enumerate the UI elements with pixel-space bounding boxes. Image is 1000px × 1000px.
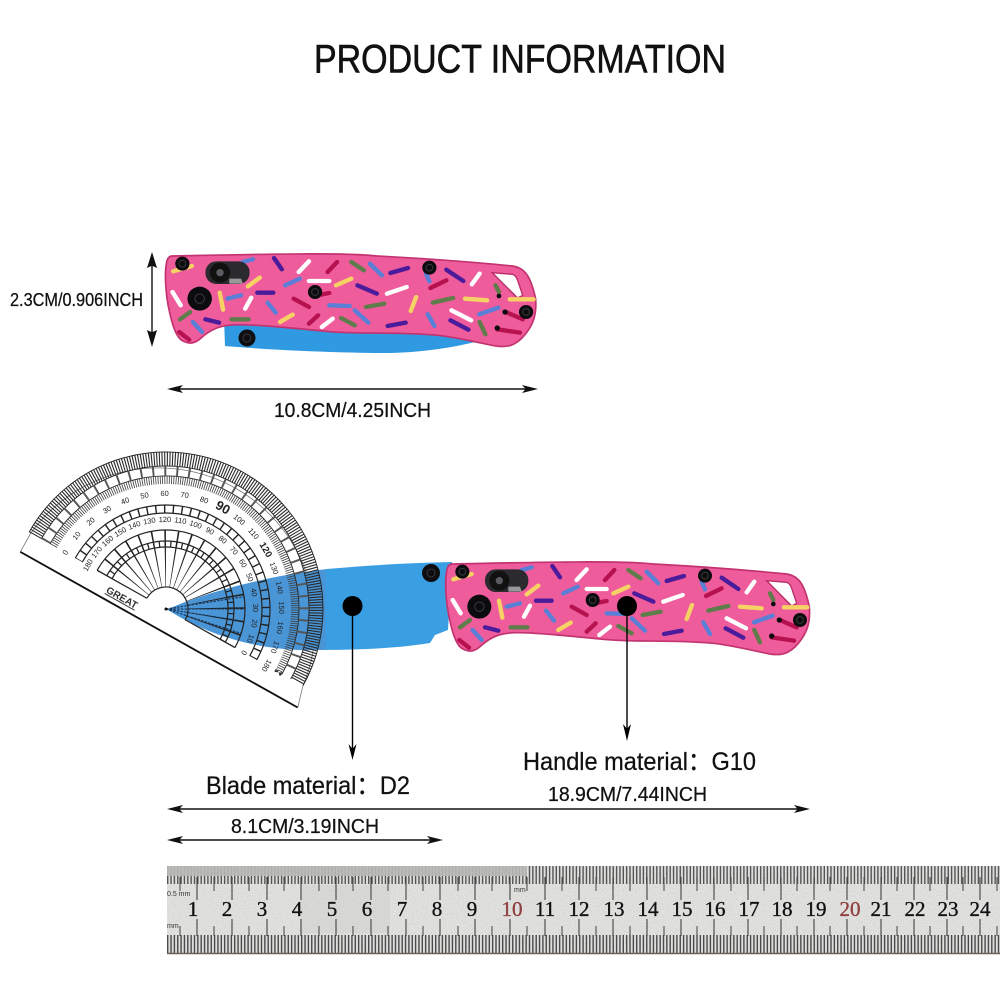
protractor outer numbers: 40 (120, 495, 131, 507)
blade pivot screw (238, 330, 256, 346)
ruler numbers: 24 (970, 897, 991, 921)
ruler numbers: 21 (870, 897, 892, 921)
ruler half ticks (180, 877, 997, 936)
ruler numbers: 7 (397, 897, 407, 921)
blade material pointer (342, 596, 362, 760)
protractor inner numbers: 170 (89, 545, 104, 560)
protractor inner numbers: 90 (204, 525, 216, 537)
ruler (167, 866, 1000, 954)
height label: 2.3CM/0.906INCH (10, 290, 143, 310)
ruler numbers: 11 (535, 897, 555, 921)
ruler numbers: 12 (568, 897, 590, 921)
ruler numbers: 19 (806, 897, 826, 921)
ruler numbers: 16 (704, 897, 726, 921)
ruler numbers: 23 (938, 897, 958, 921)
protractor outer numbers: 10 (70, 530, 83, 542)
protractor inner numbers: 50 (244, 572, 255, 583)
ruler numbers: 5 (327, 897, 337, 921)
overall length arrow (167, 805, 810, 813)
blade length arrow (167, 836, 443, 844)
protractor base (20, 412, 376, 708)
ruler numbers: 1 (188, 897, 198, 921)
protractor outer numbers: 110 (246, 526, 261, 541)
ruler numbers: 6 (362, 897, 372, 921)
protractor outer numbers: 80 (199, 494, 210, 506)
ruler numbers: 8 (432, 897, 442, 921)
protractor outer numbers: 160 (275, 621, 285, 635)
protractor outer numbers: 150 (277, 601, 286, 614)
protractor outer numbers: 120 (257, 540, 274, 560)
title: PRODUCT INFORMATION (314, 38, 726, 82)
blade length label: 8.1CM/3.19INCH (231, 816, 379, 838)
ruler numbers (188, 897, 991, 921)
ruler numbers: 4 (292, 897, 303, 921)
blade pivot screw (422, 564, 440, 582)
closed length arrow (167, 385, 538, 393)
height arrow (147, 252, 157, 347)
ruler numbers: 14 (638, 897, 659, 921)
protractor outer numbers (58, 442, 331, 673)
protractor inner numbers: 120 (159, 515, 171, 524)
protractor outer numbers: 30 (101, 504, 113, 516)
protractor inner numbers: 60 (237, 557, 249, 569)
protractor inner numbers: 100 (188, 518, 203, 531)
protractor inner numbers: 180 (81, 558, 95, 573)
protractor inner numbers: 110 (174, 515, 187, 526)
ruler numbers: 22 (904, 897, 926, 921)
protractor inner numbers: 70 (228, 545, 240, 557)
protractor outer numbers: 60 (160, 489, 169, 498)
protractor scale (20, 395, 380, 702)
ruler unit labels: mm (167, 923, 179, 930)
protractor outer numbers: 170 (269, 640, 281, 655)
ruler unit labels: 0.5 mm (167, 891, 191, 898)
protractor outer numbers: 70 (180, 490, 190, 500)
protractor inner numbers: 40 (249, 587, 259, 597)
protractor outer numbers: 50 (140, 490, 149, 501)
ruler numbers: 10 (502, 897, 522, 921)
protractor inner numbers: 0 (239, 649, 249, 657)
ruler numbers: 17 (738, 897, 760, 921)
ruler numbers: 18 (772, 897, 792, 921)
ruler unit labels (167, 887, 526, 930)
small knife, closed (165, 254, 536, 353)
overall length label: 18.9CM/7.44INCH (548, 784, 707, 806)
handle material pointer (617, 596, 637, 741)
protractor inner numbers: 140 (127, 519, 142, 532)
protractor outer numbers: 130 (268, 561, 280, 576)
closed blade (224, 318, 483, 353)
ruler unit labels: mm (514, 887, 526, 894)
blade material label: Blade material：D2 (206, 772, 410, 800)
ruler numbers: 15 (672, 897, 692, 921)
protractor outer numbers: 100 (231, 512, 247, 527)
protractor inner numbers: 10 (245, 633, 256, 644)
protractor outer numbers: 0 (60, 548, 70, 556)
ruler numbers: 2 (222, 897, 232, 921)
protractor outer numbers: 180 (260, 658, 274, 673)
ruler numbers: 20 (840, 897, 860, 921)
protractor outer numbers: 20 (85, 515, 97, 528)
ruler major ticks (197, 877, 980, 936)
protractor inner numbers: 150 (113, 525, 128, 539)
ruler numbers: 9 (467, 897, 477, 921)
protractor inner numbers: 130 (142, 515, 156, 527)
protractor inner numbers (81, 481, 294, 660)
open knife sprinkle handle (446, 562, 810, 655)
protractor inner numbers: 80 (217, 534, 229, 546)
ruler numbers: 3 (257, 897, 267, 921)
handle material label: Handle material：G10 (523, 748, 756, 776)
protractor inner numbers: 20 (249, 619, 259, 628)
protractor outer numbers: 90 (213, 497, 233, 517)
protractor outer numbers: 140 (274, 581, 285, 595)
protractor inner numbers: 30 (251, 604, 260, 612)
ruler numbers: 13 (604, 897, 624, 921)
open blade (168, 562, 452, 650)
sprinkle handle (165, 254, 536, 347)
protractor inner numbers: 160 (100, 534, 115, 549)
protractor brand: GREAT (104, 585, 139, 612)
closed length label: 10.8CM/4.25INCH (274, 400, 431, 422)
